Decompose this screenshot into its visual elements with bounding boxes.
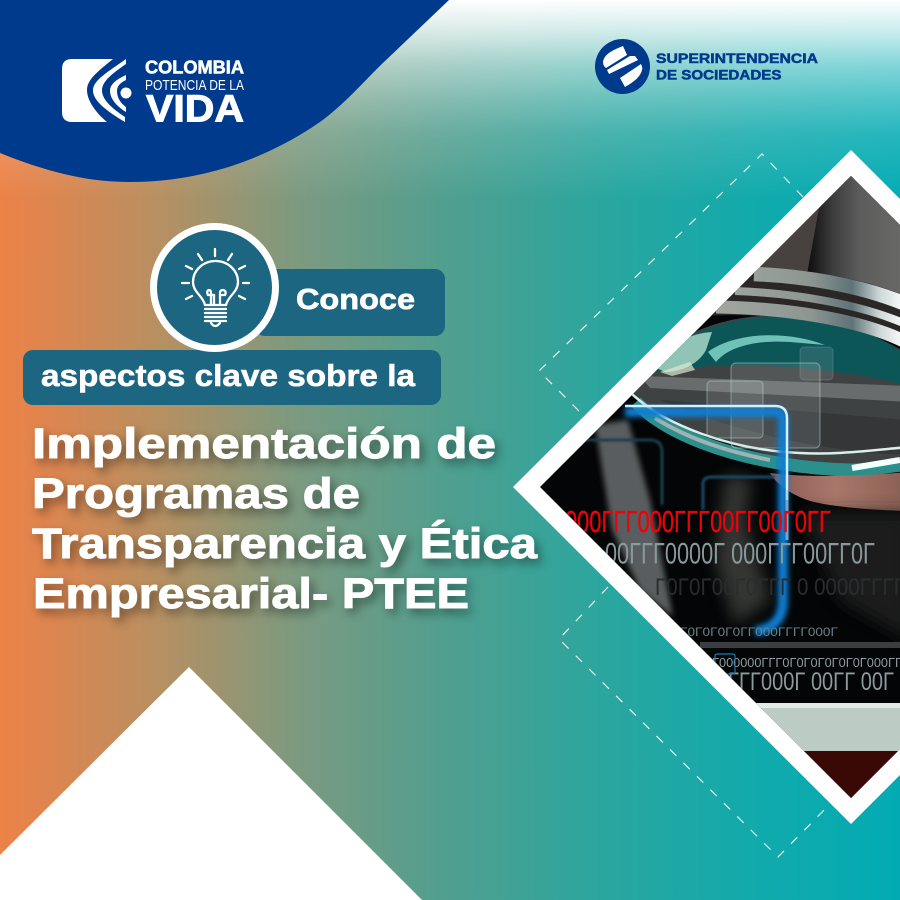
top white glow: [0, 0, 900, 200]
lens grey stripes: [640, 376, 900, 402]
logo wordmark: POTENCIA DE LA: [145, 77, 244, 94]
agency name: SUPERINTENDENCIA: [656, 51, 818, 66]
dashed outline lower: [559, 587, 829, 857]
device dark base: [804, 751, 898, 798]
title: [32, 420, 538, 618]
bar: [255, 269, 445, 336]
agency name: [656, 51, 818, 82]
text: aspectos clave sobre la: [41, 358, 416, 393]
lens reflections: [708, 335, 825, 362]
logo wordmark: VIDA: [146, 88, 244, 130]
diamond photo: magnifying glass over binary code: [530, 170, 900, 811]
dark backing behind rings: [712, 268, 900, 347]
label: Conoce: [255, 269, 445, 336]
logo wordmark: [145, 58, 244, 130]
title: Transparencia y Ética: [32, 520, 538, 568]
icon: light bulb in circle: [154, 226, 276, 348]
blue top-left wave: [0, 0, 449, 182]
logo icon: [62, 59, 132, 122]
binary code lines: Γ0Γ0Γ0Γ0ΓΓ000ΓΓΓΓ000Γ: [680, 625, 838, 639]
logo wordmark: COLOMBIA: [145, 58, 244, 78]
right fabric: [800, 512, 900, 640]
agency name: DE SOCIEDADES: [656, 68, 782, 82]
text: Conoce: [296, 284, 415, 316]
photo base: [530, 170, 900, 810]
device white bar: [756, 703, 900, 708]
dashed outline upper: [539, 154, 803, 415]
lens bottom rim: [632, 394, 900, 470]
blue glow panels: [556, 406, 787, 631]
binary code lines: [565, 504, 900, 696]
hand: [770, 472, 900, 511]
label: aspectos clave sobre la: [23, 350, 441, 405]
logo: Colombia Potencia de la Vida: [62, 58, 244, 130]
floating translucent panels: [707, 347, 833, 448]
centre fabric: [715, 475, 770, 625]
lens teal upper area: [655, 316, 900, 386]
lens body: [630, 315, 900, 470]
fabric top: [717, 176, 900, 310]
logo: Superintendencia de Sociedades: [595, 39, 818, 94]
lens rings: [716, 274, 900, 344]
left fabric: [595, 420, 673, 617]
diamond white frame: [513, 150, 900, 824]
emblem: [595, 39, 650, 94]
white bottom-left triangle: [0, 667, 422, 900]
title: Empresarial- PTEE: [33, 570, 469, 618]
title: Implementación de: [32, 420, 496, 468]
title: Programas de: [32, 470, 360, 518]
bar: [23, 350, 441, 405]
